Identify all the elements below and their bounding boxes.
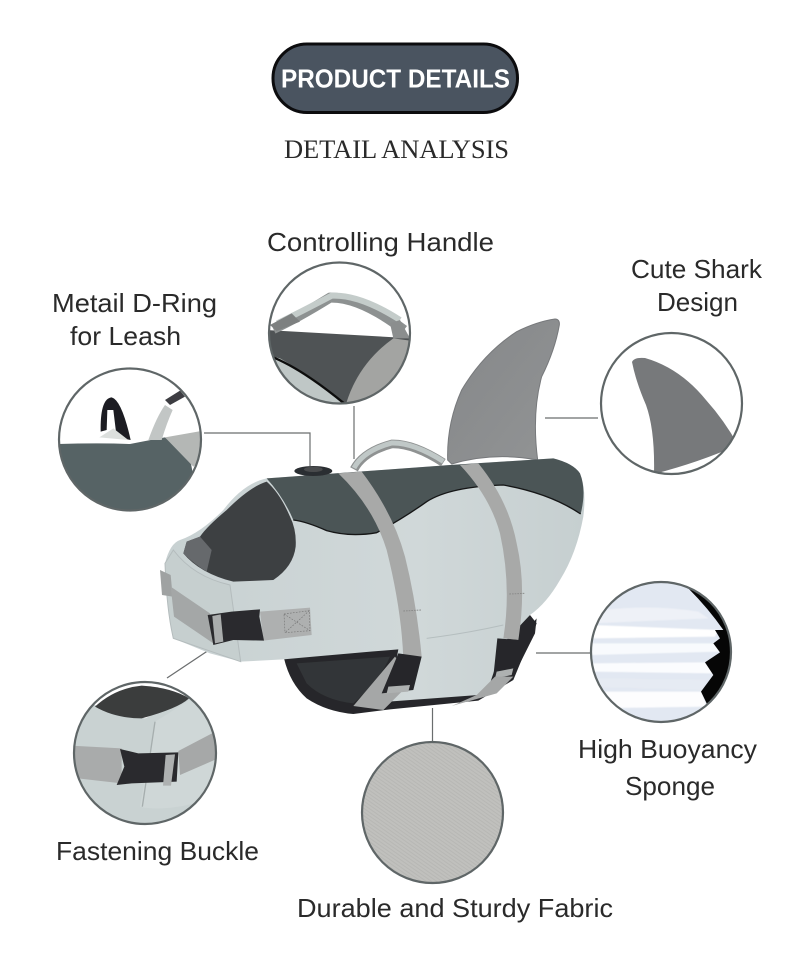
inset: fastening buckle [72,682,218,828]
label: High Buoyancy Sponge: High Buoyancy [578,734,757,764]
title badge: PRODUCT DETAILS: PRODUCT DETAILS [281,64,510,94]
label: Cute Shark Design: Design [657,287,738,317]
subtitle: DETAIL ANALYSIS: DETAIL ANALYSIS [284,134,509,164]
inset: controlling handle [267,262,413,412]
inset: shark fin [601,333,742,474]
collar panel seam [165,550,241,662]
D-ring base [294,466,332,476]
label: Metail D-Ring for Leash [52,288,217,351]
girth strap front [338,472,422,659]
lower belly seam [427,625,503,638]
label: Cute Shark Design: Cute Shark [631,254,763,284]
neck opening [183,482,296,582]
label: Controlling Handle: Controlling Handle [267,227,494,257]
label: Durable and Sturdy Fabric: Durable and Sturdy Fabric [297,893,613,923]
collar buckle [208,609,264,645]
top handle [354,444,443,469]
inset: durable fabric [362,742,503,883]
lower strap ends and side clips [353,657,413,710]
shark fin [448,319,559,464]
label: Metail D-Ring for Leash: for Leash [70,321,181,351]
label: High Buoyancy Sponge: Sponge [625,771,715,801]
underside harness [284,615,537,714]
inset: high buoyancy sponge [590,580,732,724]
girth strap rear [460,463,522,640]
label: Fastening Buckle: Fastening Buckle [56,836,259,866]
light vest body [165,458,584,702]
collar strap [160,570,173,597]
label: Cute Shark Design [631,254,763,317]
leader lines [167,406,598,741]
main product: shark dog life vest [160,319,584,714]
label: High Buoyancy Sponge [578,734,757,801]
title badge: PRODUCT DETAILS [273,44,518,112]
inset: metal D-ring [58,367,202,512]
label: Metail D-Ring for Leash: Metail D-Ring [52,288,217,318]
dark back panel [267,458,584,535]
